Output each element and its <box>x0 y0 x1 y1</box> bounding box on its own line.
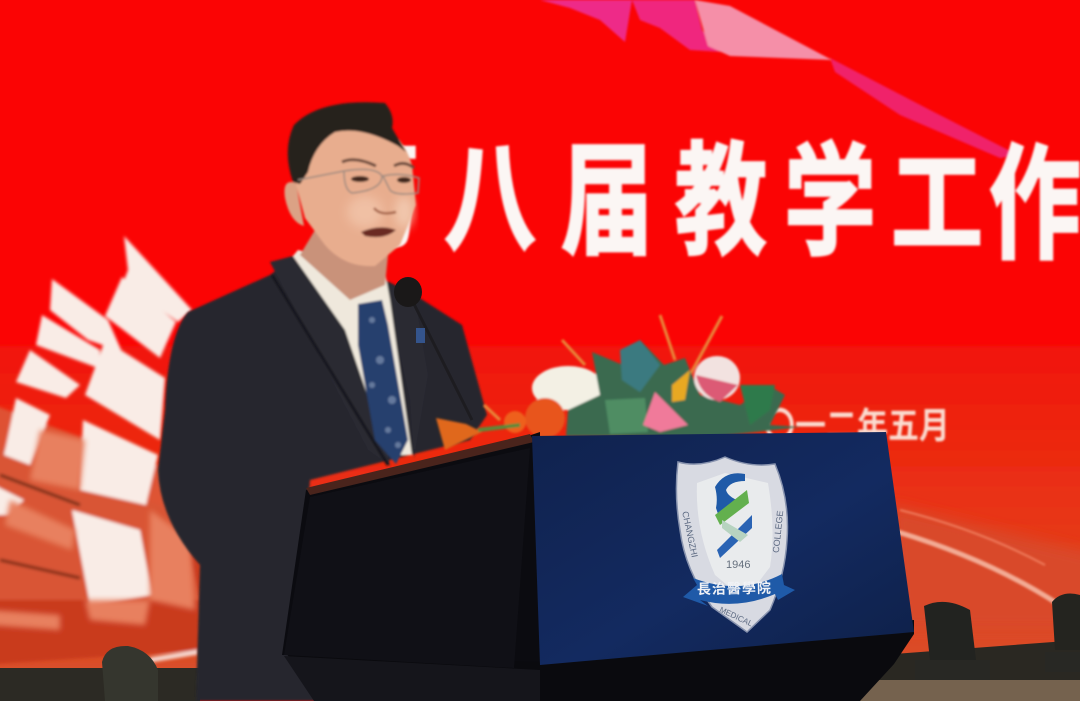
sailing ship illustration <box>0 236 205 665</box>
screen date: 〇一二年五月 <box>764 407 950 447</box>
screen title: conference name: 八 <box>444 131 536 266</box>
college emblem: CHANGZHI <box>680 510 700 558</box>
emblem ribbon <box>683 574 795 606</box>
hair <box>288 102 406 184</box>
college emblem: MEDICAL <box>718 605 755 629</box>
college emblem: 1946 <box>726 559 750 571</box>
icon: stage light left <box>102 646 158 701</box>
college emblem: 長治醫學院 <box>697 580 772 597</box>
flower arrangement <box>436 315 800 450</box>
screen title: conference name: 学 <box>784 134 876 271</box>
icon: stage light right <box>924 602 976 660</box>
eyes <box>351 176 369 182</box>
screen title: conference name: 工 <box>891 142 983 266</box>
microphone <box>394 277 472 420</box>
pink ribbon graphic on screen <box>540 0 1018 158</box>
emblem helix <box>715 473 745 520</box>
shirt collar <box>293 250 412 455</box>
speaker <box>158 102 487 701</box>
face <box>296 117 416 266</box>
college emblem <box>676 457 795 632</box>
stage floor and lights <box>0 602 1080 701</box>
ear <box>284 182 304 226</box>
screen title: conference name: 作 <box>989 137 1080 275</box>
lectern blue front panel <box>532 432 914 665</box>
jacket <box>158 258 487 701</box>
necktie <box>358 300 408 464</box>
lectern dark left side <box>282 432 540 662</box>
screen title: conference name: 第 <box>326 131 418 266</box>
screen title: conference name <box>326 131 1080 275</box>
college emblem: COLLEGE <box>771 510 785 553</box>
glasses <box>298 169 419 194</box>
lectern base <box>284 620 914 701</box>
mouth <box>361 227 396 237</box>
screen title: conference name: 教 <box>675 133 767 270</box>
screen title: conference name: 届 <box>561 133 653 270</box>
neck <box>300 225 390 300</box>
lectern <box>282 432 914 701</box>
